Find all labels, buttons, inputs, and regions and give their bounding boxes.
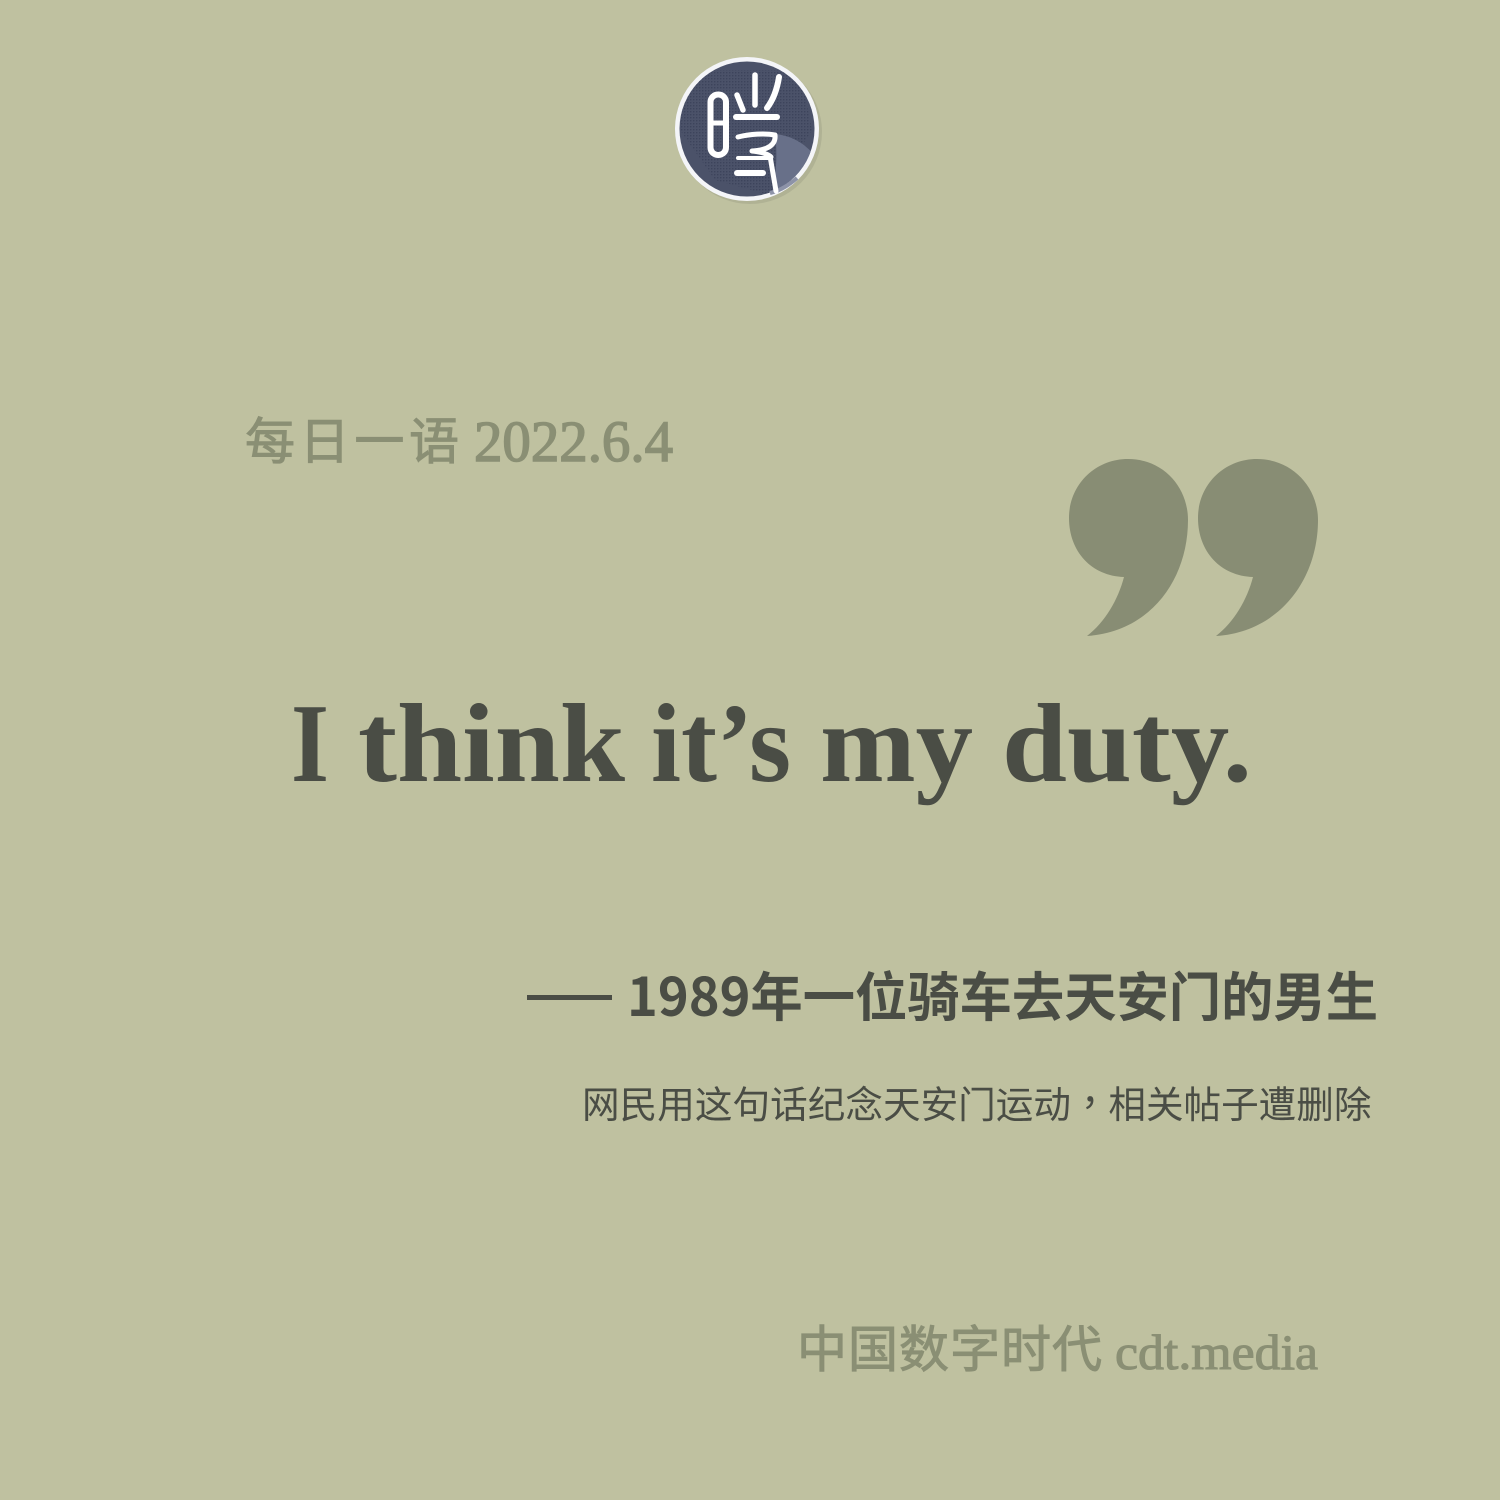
- date heading: [245, 402, 673, 474]
- main quote: I: [291, 682, 329, 806]
- context note: ，: [1081, 1061, 1119, 1116]
- main quote: [291, 682, 1252, 806]
- footer credit: cdt.media: [1115, 1324, 1318, 1380]
- main quote: my: [820, 682, 973, 806]
- date heading: 每日一语: [245, 402, 459, 474]
- attribution: 1989年一位骑车去天安门的男生: [627, 956, 1378, 1032]
- date heading: 2022.6.4: [474, 409, 673, 474]
- footer credit: 中国数字时代: [797, 1310, 1102, 1382]
- logo badge: [675, 57, 822, 204]
- footer credit: [797, 1310, 1318, 1382]
- main quote: think: [358, 682, 626, 806]
- context note: 网民用这句话纪念天安门运动: [582, 1074, 1071, 1129]
- context note: [582, 1061, 1371, 1129]
- context note: 相关帖子遭删除: [1108, 1074, 1371, 1129]
- main quote: duty.: [1002, 682, 1252, 806]
- closing quotation mark icon: [1069, 459, 1318, 636]
- main quote: it’s: [651, 682, 791, 806]
